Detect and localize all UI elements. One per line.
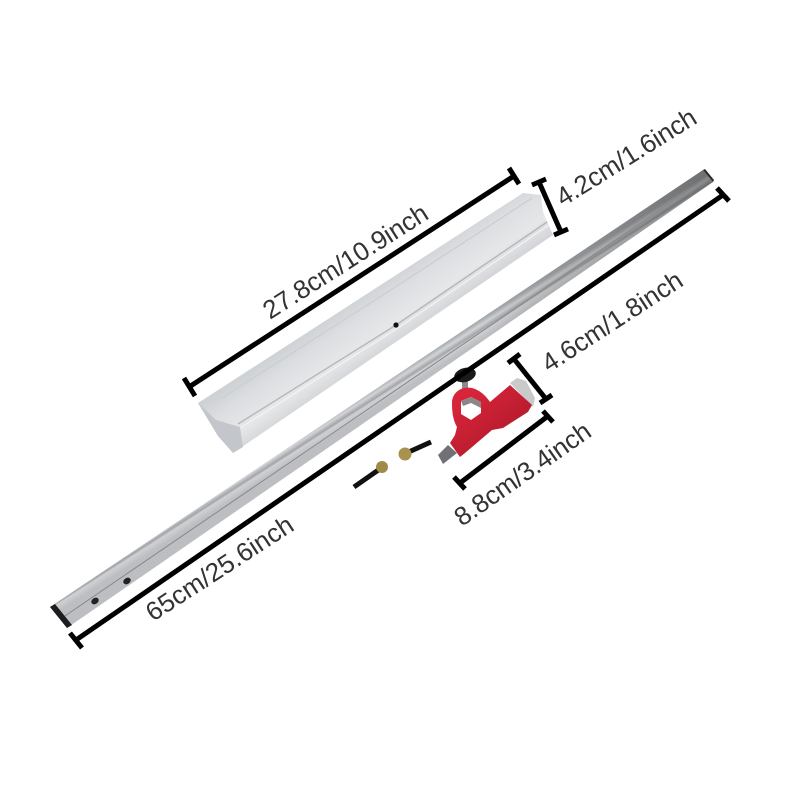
knob: [453, 365, 477, 390]
dimension: panel length: [184, 168, 519, 396]
bar holes: [90, 596, 100, 606]
panel hole: [393, 322, 399, 328]
dimension: bar length: 65cm/25.6inch: [140, 509, 299, 627]
long ruler bar: [50, 169, 714, 628]
dimension: panel width: 4.2cm/1.6inch: [550, 102, 702, 212]
hexagon opening: [461, 397, 481, 420]
dimension: head height: [508, 265, 688, 403]
screw 2: [398, 442, 431, 460]
aluminium guide panel: [198, 193, 553, 453]
red cutter head: [438, 365, 535, 464]
dimension: panel length: 27.8cm/10.9inch: [257, 198, 433, 325]
dimension: head length: 8.8cm/3.4inch: [448, 416, 597, 532]
dimension: head height: 4.6cm/1.8inch: [536, 265, 688, 378]
cutter body: [450, 385, 532, 457]
screw 1: [354, 461, 388, 487]
bar end cap: [50, 604, 72, 628]
grey end disc: [510, 378, 535, 407]
cutter blade: [438, 445, 457, 464]
